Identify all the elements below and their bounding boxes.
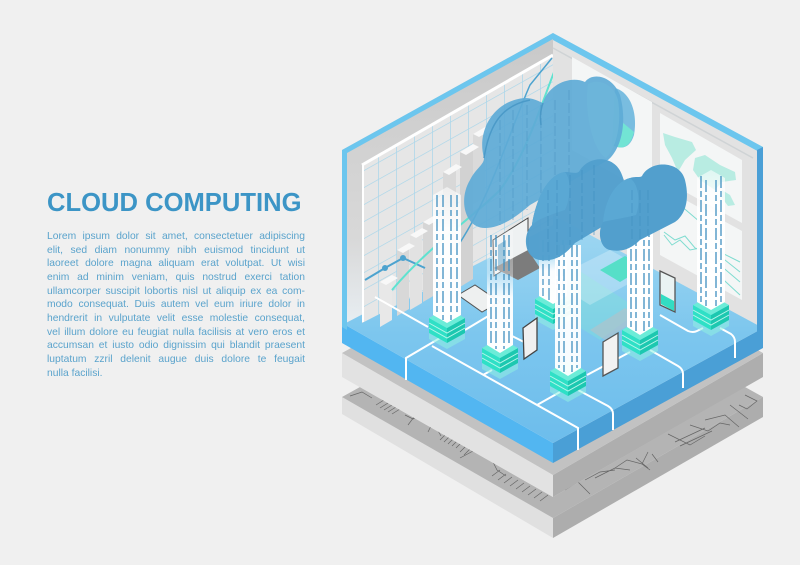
circuit traces xyxy=(350,392,757,501)
body text block: nulla facilisi. xyxy=(47,368,103,379)
body text block xyxy=(47,231,305,379)
wall: right wall with screens xyxy=(553,33,763,335)
floor circuit lines xyxy=(375,297,735,450)
wall line chart xyxy=(365,45,565,290)
body text block: accumsan et iusto odio dignissim qui blandit praesent xyxy=(47,340,305,351)
pillar 5 xyxy=(693,170,729,336)
pillar 4 xyxy=(622,225,658,361)
pillar 2 xyxy=(482,230,518,379)
device: laptop xyxy=(493,218,540,280)
screen: world map panel xyxy=(660,113,742,223)
device: phone teal xyxy=(660,271,675,312)
layer: middle grey slab xyxy=(342,343,763,497)
body text block: elit, sed diam nonummy nibh euismod tincidunt ut xyxy=(47,245,305,256)
body text block: hendrerit in vulputate velit esse molestie consequat, xyxy=(47,313,305,324)
pillar 1 xyxy=(429,187,465,349)
wall: left glass wall xyxy=(342,33,565,330)
body text block: ullamcorper suscipit lobortis nisl ut aliquip ex ea com- xyxy=(47,286,305,297)
cloud: small xyxy=(600,164,687,251)
screen: pie chart panel xyxy=(572,57,652,195)
pillar 6 back xyxy=(535,230,571,330)
body text block: enim ad minim veniam, quis nostrud exerci tation xyxy=(47,272,305,283)
screen: line charts panel xyxy=(660,186,742,300)
device: phone left xyxy=(523,318,537,359)
device: grey tablet xyxy=(458,285,500,312)
title: CLOUD COMPUTING xyxy=(47,189,302,217)
cloud: large xyxy=(464,76,623,228)
device: phone centre xyxy=(603,333,618,376)
layer: blue platform xyxy=(342,205,763,463)
device: teal tablet xyxy=(600,256,645,282)
wall bar chart xyxy=(380,127,491,327)
body text block: vel illum dolore eu feugiat nulla facilisis at vero eros et xyxy=(47,327,305,338)
layer: bottom circuit slab xyxy=(342,387,763,538)
cloud: medium xyxy=(526,159,626,260)
body text block: Lorem ipsum dolor sit amet, consectetuer adipiscing xyxy=(47,231,305,242)
body text block: laoreet dolore magna aliquam erat volutpat. Ut wisi xyxy=(47,258,305,269)
pillar 3 xyxy=(550,245,586,402)
body text block: modo consequat. Duis autem vel eum iriure dolor in xyxy=(47,299,305,310)
glass sheet and floor details xyxy=(535,250,650,340)
body text block: luptatum zzril delenit augue duis dolore te feugait xyxy=(47,354,305,365)
